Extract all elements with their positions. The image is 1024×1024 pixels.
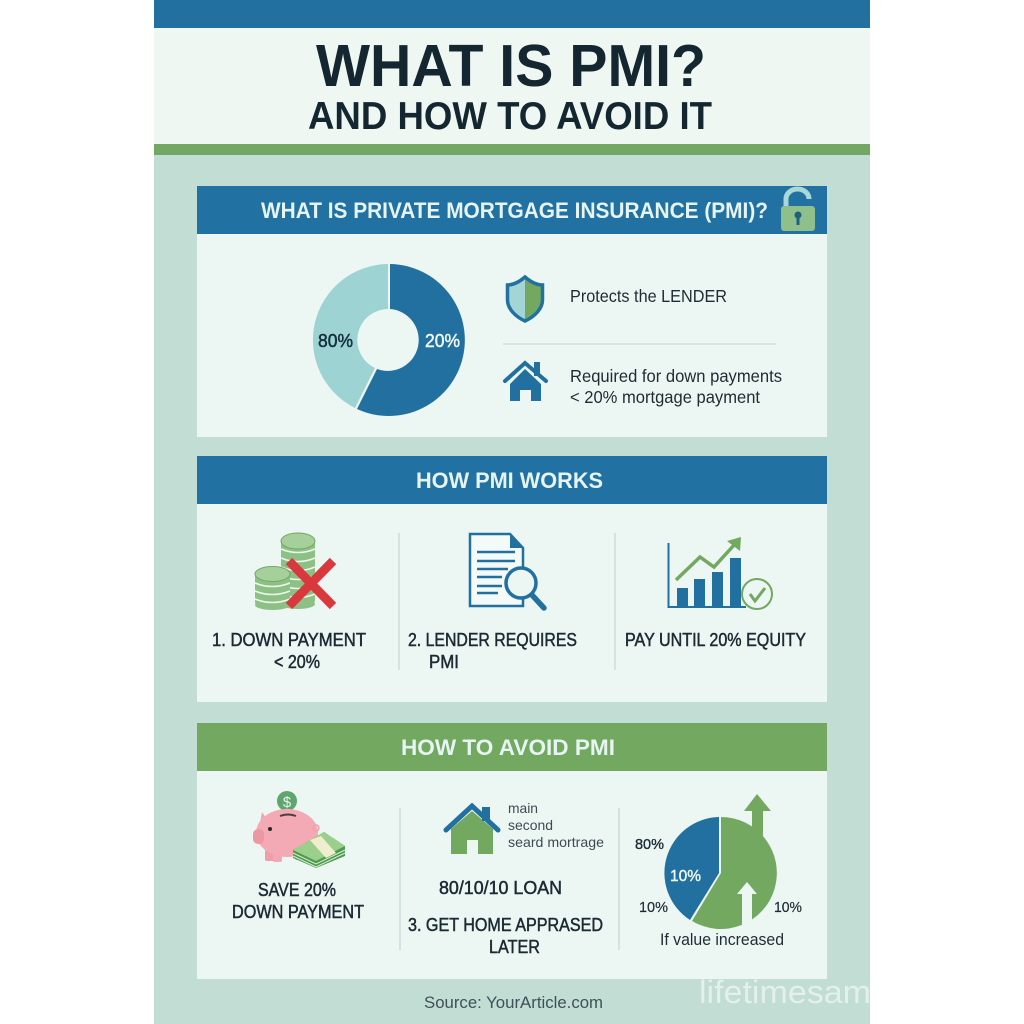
tip 3 label: [408, 914, 603, 957]
tip 1 label: DOWN PAYMENT: [232, 901, 364, 922]
icon: open padlock: [781, 189, 815, 231]
pie chart with arrows: 10%: [670, 868, 701, 885]
caption: if value increased: If value increased: [660, 931, 784, 949]
watermark: lifetimesam: [699, 974, 871, 1010]
tip 1 label: SAVE 20%: [258, 879, 336, 900]
title block: [154, 28, 870, 144]
pie labels: [635, 836, 802, 916]
tip 3 label: LATER: [489, 936, 540, 957]
icon: piggy bank with cash: [253, 791, 345, 868]
panel heading: [197, 456, 827, 504]
panel heading: HOW TO AVOID PMI: [401, 735, 615, 760]
tip 1 label: [232, 879, 364, 922]
panel: what is PMI: [197, 186, 827, 437]
loan parts list: second: [508, 817, 553, 833]
icon: bar chart with check: [668, 537, 772, 609]
step 2 label: 2. LENDER REQUIRES: [408, 629, 577, 650]
text: required for down payments: < 20% mortgage payment: [570, 387, 760, 407]
pie labels: 10%: [639, 899, 668, 916]
icon: house with roof: [446, 806, 498, 854]
text: protects the lender: Protects the LENDER: [570, 286, 727, 306]
icon: piggy bank with cash: $: [283, 794, 292, 811]
source line: Source: YourArticle.com: [424, 993, 603, 1012]
panel heading: WHAT IS PRIVATE MORTGAGE INSURANCE (PMI)?: [261, 198, 768, 223]
panel: how to avoid PMI: [197, 723, 827, 979]
panel heading: [197, 723, 827, 771]
step 1 label: 1. DOWN PAYMENT: [212, 629, 366, 650]
step 2 label: [408, 629, 577, 672]
panel heading: HOW PMI WORKS: [416, 468, 603, 493]
icon: coin stacks with red cross: [255, 533, 333, 610]
title: WHAT IS PMI?: [316, 33, 706, 99]
text: required for down payments: [570, 366, 782, 407]
text: required for down payments: Required for down payments: [570, 366, 782, 386]
donut chart: [313, 264, 465, 416]
tip 2 label: 80/10/10 LOAN: [439, 877, 562, 898]
step 2 label: PMI: [429, 651, 459, 672]
pie labels: 10%: [774, 899, 802, 916]
icon: shield: [508, 277, 542, 321]
subtitle: AND HOW TO AVOID IT: [308, 95, 712, 138]
pie chart with arrows: [664, 794, 777, 930]
step 1 label: [212, 629, 366, 672]
loan parts list: [508, 800, 604, 850]
donut chart: 80%: [318, 330, 353, 351]
panel: how PMI works: [197, 456, 827, 702]
loan parts list: seard mortrage: [508, 834, 604, 850]
top banner: [154, 0, 870, 28]
step 3 label: PAY UNTIL 20% EQUITY: [625, 629, 806, 650]
pie labels: 80%: [635, 836, 664, 853]
icon: house: [505, 362, 546, 401]
loan parts list: main: [508, 800, 538, 816]
green rule: [154, 144, 870, 155]
panel heading: [197, 186, 827, 234]
icon: document with magnifier: [470, 534, 544, 608]
step 1 label: < 20%: [274, 651, 320, 672]
tip 3 label: 3. GET HOME APPRASED: [408, 914, 603, 935]
donut chart: 20%: [425, 330, 460, 351]
